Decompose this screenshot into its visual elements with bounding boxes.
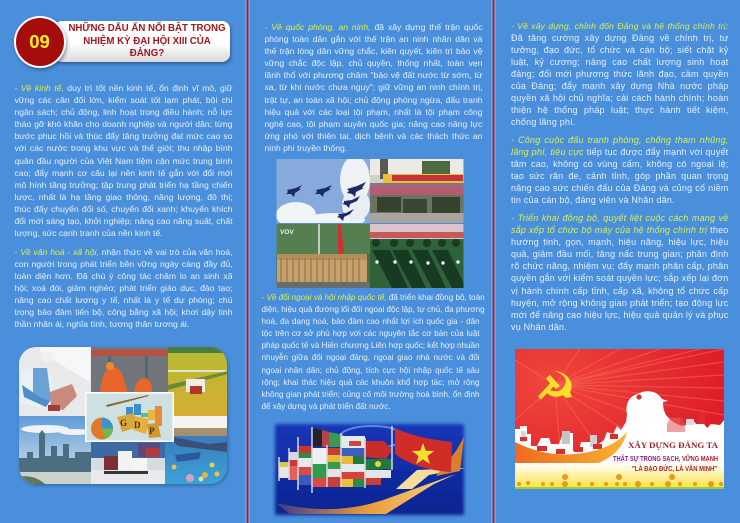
- white dove and city: [515, 391, 724, 463]
- GDP inset: G: [120, 418, 127, 428]
- text: economy: thúc đẩy chuyển đổi số, chuyển đổi xanh; khuyến khích: [14, 204, 232, 214]
- text: economy: lược, nhất là hạ tầng giao thông, năng lượng, đô thị;: [14, 192, 232, 202]
- photo collage: economy and GDP: [19, 347, 228, 484]
- text: foreign affairs: tộc trên cơ sở phù hợp với các nguyên tắc cơ bản của luật: [262, 329, 480, 338]
- text: organisational restructuring: quyền gắn với kiểm soát quyền lực; sắp xếp lại đơn: [511, 273, 728, 283]
- text: organisational restructuring: rõ chức năng, nhiệm vụ; đẩy mạnh phân cấp, phân: [511, 261, 728, 271]
- text: defence and security: thế trận lòng dân vững chắc, kiên quyết, kiên trì bảo vệ: [264, 46, 482, 56]
- text: economy: ngân sách; chủ động, linh hoạt trong điều hành; nỗ lực: [14, 107, 232, 117]
- text: Party building: quyền xã hội chủ nghĩa; cải cách hành chính; hoàn: [511, 93, 728, 103]
- text: organisational restructuring: sắp xếp tổ chức bộ máy của hệ thống chính trị theo: [511, 225, 728, 235]
- GDP inset: [85, 392, 174, 442]
- text: foreign affairs: hoá, đa dạng hoá, bảo đảm cao nhất lợi ích quốc gia - dân: [262, 317, 480, 326]
- text: defence and security: - Về quốc phòng, an ninh, đã xây dựng thế trận quốc: [264, 22, 482, 32]
- photo collage: defence and security: VOV: [280, 229, 294, 236]
- text: Party building: đảng; đổi mới phương thức lãnh đạo, cầm quyền: [511, 69, 728, 79]
- text: foreign affairs: ngoại nhân dân; chủ động, tích cực hội nhập quốc tế sâu: [262, 366, 480, 375]
- text: foreign affairs: nhuyễn giữa đối ngoại đảng, ngoại giao nhà nước và đối: [262, 353, 480, 362]
- text: anti-corruption: lãng phí, tiêu cực tiếp tục được đẩy mạnh với quyết: [511, 147, 728, 157]
- text: organisational restructuring: hướng tinh, gọn, mạnh, hiệu năng, hiệu lực, hiệu: [511, 237, 728, 247]
- GDP inset: P: [149, 426, 155, 436]
- text: culture and society: - Về văn hoá - xã hội, nhận thức về vai trò của văn hoá,: [14, 246, 232, 256]
- text: anti-corruption: nâng cao sức chiến đấu của Đảng và củng cố niềm: [511, 183, 728, 193]
- small flags: [279, 428, 392, 487]
- text: foreign affairs: không gian phát triển; củng cố môi trường hoà bình, ổn định: [262, 390, 480, 399]
- text: Party building: chống lãng phí.: [511, 117, 576, 127]
- text: defence and security: ứng phó với thiên tai, dịch bệnh và các thách thức an: [264, 131, 482, 141]
- text: anti-corruption: tâm cao, không có vùng cấm, không có ngoại lệ;: [511, 159, 728, 169]
- text: foreign affairs: để xây dựng và phát triển đất nước.: [262, 402, 391, 411]
- icon: hammer and sickle: [538, 371, 572, 400]
- text: Party building: tưởng, đạo đức, tổ chức và cán bộ; siết chặt kỷ: [511, 45, 728, 55]
- sunflowers: [515, 474, 724, 489]
- text: anti-corruption: tin của cán bộ, đảng viên và Nhân dân.: [511, 195, 675, 205]
- text: culture and society: con người trong phát triển bền vững ngày càng đầy đủ,: [14, 259, 232, 269]
- text: foreign affairs: - Về đối ngoại và hội nhập quốc tế, đã triển khai đồng bộ, toàn: [262, 293, 485, 302]
- text: defence and security: lãnh thổ với phương châm "bảo vệ đất nước từ sớm, từ: [264, 70, 482, 80]
- number badge 09: 09: [29, 30, 50, 52]
- text: economy: quân đầu người của Việt Nam tiệm cận mức trung bình: [14, 156, 232, 166]
- text: culture and society: trọng bảo đảm tiến bộ, công bằng xã hội; khơi dậy tinh: [14, 307, 232, 317]
- text: defence and security: vững chắc độc lập, chủ quyền, thống nhất, toàn vẹn: [264, 58, 482, 68]
- text: organisational restructuring: quả, giảm đầu mối, tăng nấc trung gian; phân định: [511, 249, 728, 259]
- banner slogan: THẬT SỰ TRONG SẠCH, VỮNG MẠNH: [613, 454, 718, 463]
- text: economy: lượng, sức cạnh tranh của nền kinh tế.: [14, 228, 163, 238]
- banner slogan: [613, 440, 719, 473]
- text: culture and society: thần nhân ái, nghĩa tình, tương thân tương ái.: [14, 319, 189, 329]
- number badge 09: [14, 16, 66, 68]
- text: defence and security: trật tự, an toàn xã hội; chủ động phòng ngừa, đấu tranh: [264, 95, 482, 105]
- text: defence and security: phòng toàn dân gắn với thế trận an ninh nhân dân và: [264, 34, 482, 44]
- text: economy: vững các cân đối lớn, kiểm soát tốt lạm phát, bội chi: [14, 95, 232, 105]
- text: organisational restructuring: vị hành chính cấp tỉnh, cấp xã, không tổ chức cấp: [511, 286, 728, 296]
- banner slogan: XÂY DỰNG ĐẢNG TA: [628, 440, 719, 450]
- text: Party building: của Đảng; đẩy mạnh xây dựng Nhà nước pháp: [511, 81, 728, 91]
- text: economy: tháo gỡ khó khăn cho doanh nghiệp và người dân; từng: [14, 119, 232, 129]
- text: economy: với các nước trong khu vực và thế giới; thu nhập bình: [14, 143, 232, 153]
- image: international flags: [275, 424, 465, 515]
- heading pill: ĐẢNG?: [130, 48, 164, 59]
- text: economy: - Về kinh tế, duy trì tốt nền kinh tế, ổn định vĩ mô, giữ: [14, 83, 232, 93]
- text: defence and security: xa, từ khi nước chưa nguy"; giữ vững an ninh chính trị,: [264, 82, 482, 92]
- text: economy: bước phục hồi và thúc đẩy tăng trưởng đạt mức cao so: [14, 131, 232, 141]
- text: organisational restructuring: - Triển khai đồng bộ, quyết liệt cuộc cách mạng về: [511, 213, 728, 223]
- text: defence and security: hiệu quả với các loại tội phạm, nhất là tội phạm công: [264, 107, 482, 117]
- heading pill: NHỮNG DẤU ẤN NỔI BẬT TRONG: [68, 23, 226, 34]
- text: economy: đổi mới sáng tạo, khởi nghiệp; nâng cao năng suất, chất: [14, 216, 232, 226]
- text: economy: cao; đẩy mạnh cơ cấu lại nền kinh tế gắn với đổi mới: [14, 168, 232, 178]
- text: anti-corruption: [511, 135, 728, 205]
- GDP inset: D: [134, 420, 141, 430]
- heading pill: NHIỆM KỲ ĐẠI HỘI XIII CỦA: [83, 36, 211, 47]
- text: organisational restructuring: huyện, mở rộng không gian phát triển; tạo động lực: [511, 298, 728, 308]
- banner: Party building: [515, 349, 736, 489]
- text: culture and society: nâng cao chất lượng y tế, nhất là y tế dự phòng; chú: [14, 295, 232, 305]
- text: foreign affairs: diện, hiệu quả đường lối đối ngoại độc lập, tự chủ, đa phương: [262, 305, 485, 314]
- banner slogan: "LÀ ĐẠO ĐỨC, LÀ VĂN MINH": [632, 464, 717, 473]
- text: Party building: [511, 20, 728, 127]
- photo collage: defence and security: [276, 156, 466, 288]
- text: economy: [14, 83, 232, 238]
- text: Party building: Đã tăng cường xây dựng Đảng về chính trị, tư: [511, 33, 728, 43]
- text: defence and security: [264, 22, 483, 153]
- text: foreign affairs: [262, 293, 485, 411]
- text: foreign affairs: rộng; khai thác hiệu quả các khuôn khổ hợp tác; mở rộng: [262, 378, 480, 387]
- text: foreign affairs: pháp quốc tế và Hiến chương Liên hợp quốc; kết hợp nhuần: [262, 341, 480, 350]
- text: Party building: - Về xây dựng, chỉnh đốn Đảng và hệ thống chính trị:: [511, 20, 728, 30]
- text: Party building: luật, kỷ cương; nâng cao chất lượng sinh hoạt: [511, 57, 728, 67]
- text: culture and society: [14, 246, 233, 329]
- text: defence and security: nghệ cao, tội phạm xuyên quốc gia; nâng cao năng lực: [264, 119, 482, 129]
- text: defence and security: ninh phi truyền thống.: [264, 143, 347, 153]
- text: anti-corruption: - Công cuộc đấu tranh phòng, chống tham nhũng,: [511, 135, 728, 145]
- text: culture and society: toàn diện hơn. Đã chú ý công tác chăm lo an sinh xã: [14, 271, 232, 281]
- text: organisational restructuring: mới để nâng cao hiệu lực, hiệu quả quản lý và phục: [511, 310, 728, 320]
- heading pill: [54, 21, 230, 62]
- text: organisational restructuring: vụ Nhân dân.: [511, 322, 567, 332]
- text: Party building: thiện hệ thống pháp luật; thực hành tiết kiệm,: [511, 105, 728, 115]
- text: anti-corruption: tạo sức răn đe, cảnh tỉnh, góp phần quan trọng: [511, 171, 728, 181]
- text: culture and society: hội; xoá đói, giảm nghèo; phát triển giáo dục, đào tạo;: [14, 283, 232, 293]
- text: economy: mô hình tăng trưởng; tập trung phát triển hạ tầng chiến: [14, 180, 232, 190]
- column dividers: [246, 0, 496, 523]
- text: organisational restructuring: [511, 213, 728, 332]
